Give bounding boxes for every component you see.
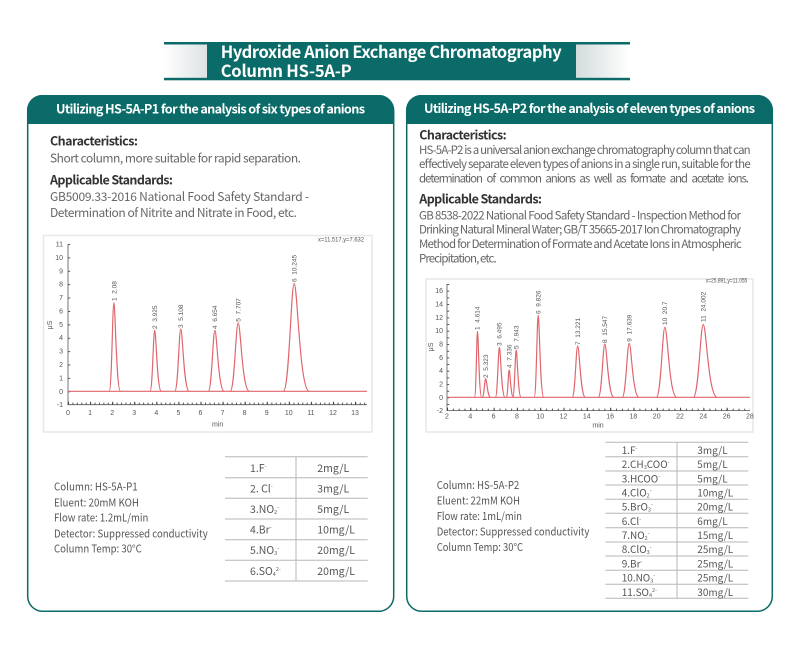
chromatogram chart: P1: 6 10.245 [292, 255, 298, 282]
concentration table: P1: 2- [276, 565, 281, 573]
experimental conditions: P2 [437, 477, 590, 555]
concentration table: P2: 1.F [622, 442, 636, 457]
characteristics text: P1: Characteristics: [50, 131, 138, 150]
title banner: Column HS-5A-P [221, 58, 352, 82]
experimental conditions: P2: Column: HS-5A-P2 [437, 477, 519, 493]
concentration table: P2: 20mg/L [697, 498, 734, 514]
characteristics text: P2: effectively separate eleven types of anions in a single run, suitable for the [419, 156, 751, 172]
chromatogram chart: P1: 0 [66, 410, 70, 417]
concentration table: P2: 8.ClO [622, 541, 647, 556]
chromatogram chart: P2: 6 [439, 355, 443, 362]
applicable standards text: P2: Method for Determination of Formate and Acetate Ions in Atmospheric [419, 236, 742, 252]
chromatogram chart: P1: 5 [59, 322, 63, 329]
chromatogram chart: P1: 13 [351, 410, 359, 417]
chromatogram chart: P1: μS [47, 320, 54, 329]
concentration table: P2: 6mg/L [697, 513, 728, 528]
concentration table: P1: 5.NO [250, 543, 274, 558]
characteristics text: P1 [50, 131, 301, 167]
chromatogram chart: P1: 4 6.654 [212, 305, 219, 329]
chromatogram chart: P2: 20 [653, 414, 661, 420]
chromatogram chart: P1: 10 [55, 255, 63, 262]
concentration table: P1 [225, 457, 368, 581]
chromatogram chart: P2: 2 5.323 [483, 354, 490, 378]
chromatogram chart: P2: 16 [435, 288, 443, 295]
concentration table: P2: 3mg/L [697, 442, 728, 457]
chromatogram chart: P1: 2 3.925 [152, 305, 159, 329]
concentration table: P1: - [277, 544, 279, 552]
chromatogram chart: P2: 7 13.221 [575, 318, 582, 345]
concentration table: P1: 1.F [250, 461, 265, 476]
chromatogram chart: P2: 0 [439, 395, 443, 402]
chromatogram chart: P1: 8 [243, 410, 247, 417]
chromatogram chart: P1: 6 [59, 308, 63, 316]
concentration table: P2: 3.HCOO [622, 470, 658, 486]
concentration table: P2: - [658, 472, 660, 480]
chromatogram chart: P1: 9 [59, 268, 63, 275]
concentration table: P1: 4.Br [250, 522, 270, 538]
chromatogram chart: P2: 26 [723, 414, 731, 420]
concentration table: P2: 2 [645, 534, 648, 542]
panel header: P2 [406, 95, 773, 124]
chromatogram chart: P2: 14 [583, 414, 591, 420]
concentration table: P2: 3 [647, 548, 650, 556]
concentration table: P2: 5mg/L [697, 456, 728, 471]
concentration table: P2: 5.BrO [622, 498, 648, 514]
concentration table: P2: 4 [649, 591, 652, 599]
chromatogram chart: P1: x=11.517,y=7.632 [318, 237, 364, 244]
chromatogram chart: P2: 16 [606, 414, 614, 420]
concentration table: P2 [605, 442, 748, 599]
chromatogram chart: P2: 10 20.7 [662, 301, 669, 325]
chromatogram chart: P1: 1 [59, 375, 63, 382]
experimental conditions: P1: Detector: Suppressed conductivity [54, 526, 208, 542]
chromatogram chart: P2: 28 [746, 414, 754, 420]
concentration table: P2: - [636, 444, 638, 452]
chromatogram chart: P1: 11 [307, 410, 315, 417]
title banner: Hydroxide Anion Exchange Chromatography [221, 39, 562, 63]
chromatogram chart: P1: 3 5.108 [178, 304, 185, 328]
panel header: P1 [27, 95, 394, 124]
applicable standards text: P2: Drinking Natural Mineral Water; GB/T 35665-2017 Ion Chromatography [419, 221, 741, 237]
chromatogram chart: P1: 7 [59, 295, 63, 302]
chromatogram chart: P1: 4 [154, 410, 158, 417]
chromatogram chart: P1: 5 7.707 [236, 298, 242, 322]
concentration table: P2: 7.NO [622, 527, 645, 542]
concentration table: P1: 20mg/L [317, 564, 355, 579]
chromatogram chart: P2: 3 6.495 [496, 322, 504, 346]
applicable standards text: P1: Determination of Nitrite and Nitrate in Food, etc. [50, 204, 297, 221]
chromatogram chart: P1: 11 [56, 242, 63, 248]
chromatogram chart: P1: 4 [59, 335, 63, 342]
applicable standards text: P1: GB5009.33-2016 National Food Safety Standard - [50, 188, 309, 205]
concentration table: P1: 10mg/L [317, 522, 355, 538]
chromatogram chart: P2: 12 [435, 315, 443, 322]
experimental conditions: P1: Eluent: 20mM KOH [54, 494, 139, 510]
concentration table: P1: - [265, 462, 267, 470]
experimental conditions: P2: Flow rate: 1mL/min [437, 508, 522, 524]
experimental conditions: P1 [54, 479, 208, 557]
chromatogram chart: P2: 4 [468, 414, 472, 420]
concentration table: P2: 15mg/L [697, 527, 734, 542]
chromatogram chart: P1: min [212, 422, 223, 429]
characteristics text: P2: Characteristics: [419, 124, 507, 143]
experimental conditions: P2: Column Temp: 30°C [437, 539, 523, 555]
concentration table: P2: 10mg/L [697, 484, 734, 500]
chromatogram chart: P2: 2 [445, 414, 449, 420]
concentration table: P1: 3 [274, 549, 277, 557]
applicable standards text: P2: Precipitation, etc. [419, 250, 497, 266]
concentration table: P2: - [648, 529, 650, 537]
concentration table: P2: 3 [650, 576, 653, 584]
concentration table: P1: - [270, 524, 272, 532]
experimental conditions: P1: Column: HS-5A-P1 [54, 479, 138, 495]
chromatogram chart: P1: 2 [110, 410, 114, 417]
chromatogram chart: P1: 2 [59, 362, 63, 369]
chromatogram chart: P2: 8 [439, 342, 443, 348]
chromatogram chart: P2 [426, 278, 754, 432]
applicable standards text: P2: GB 8538-2022 National Food Safety Standard - Inspection Method for [419, 207, 742, 223]
chromatogram chart: P2: 6 [492, 414, 496, 420]
concentration table: P1: 2 [274, 508, 277, 516]
chromatogram chart: P2: min [592, 422, 604, 430]
concentration table: P2: COO [647, 456, 668, 471]
chromatogram chart: P2: 9 17.639 [626, 314, 633, 342]
chromatogram chart: P1: 10 [285, 410, 293, 417]
chromatogram chart: P1: 1 [88, 410, 92, 417]
concentration table: P1: - [277, 503, 279, 511]
concentration table: P2: 6.Cl [622, 513, 639, 528]
chromatogram chart: P2: 2 [439, 382, 443, 388]
chromatogram chart: P2: 1 4.614 [474, 306, 482, 330]
concentration table: P2: - [640, 558, 642, 566]
concentration table: P2: 25mg/L [697, 570, 734, 584]
concentration table: P2: 30mg/L [697, 584, 734, 599]
concentration table: P1: 6.SO [250, 564, 273, 579]
characteristics text: P2: HS-5A-P2 is a universal anion exchange chromatography column that can [419, 142, 751, 158]
title banner [164, 39, 630, 82]
concentration table: P1: 4 [273, 570, 276, 578]
concentration table: P2: 9.Br [622, 556, 640, 570]
chromatogram chart: P2: 10 [435, 328, 443, 335]
chromatogram chart: P1: 0 [59, 389, 63, 396]
panel: HS-5A-P1 analysis of six anions [27, 95, 394, 611]
concentration table: P2: 25mg/L [697, 556, 734, 570]
chromatogram chart: P1: 6 [199, 410, 203, 417]
characteristics text: P1: Short column, more suitable for rapid separation. [50, 150, 301, 167]
concentration table: P2: 3 [648, 506, 651, 514]
applicable standards text: P2 [418, 188, 742, 266]
chromatogram chart: P2: 12 [560, 414, 567, 420]
chromatogram chart: P1: -1 [57, 402, 63, 409]
chromatogram chart: P2: 11 24.002 [700, 291, 707, 322]
concentration table: P2: 2- [652, 586, 657, 594]
chromatogram chart: P1: 5 [176, 410, 180, 417]
chromatogram chart: P1: 7 [221, 410, 225, 417]
concentration table: P1: 3.NO [250, 502, 274, 517]
chromatogram chart: P2: 5 7.943 [513, 325, 520, 349]
experimental conditions: P1: Column Temp: 30°C [54, 541, 142, 557]
chromatogram chart: P1: 8 [59, 282, 63, 289]
experimental conditions: P2: Eluent: 22mM KOH [437, 492, 520, 508]
concentration table: P1: - [271, 483, 273, 491]
chromatogram chart: P1 [44, 236, 372, 432]
concentration table: P1: 20mg/L [317, 543, 355, 558]
concentration table: P2: 2.CH [622, 456, 644, 471]
chromatogram chart: P2: 18 [630, 414, 637, 420]
chromatogram chart: P1: 9 [265, 410, 269, 417]
chromatogram chart: P2: x=25.891,y=11.055 [706, 278, 748, 285]
chromatogram chart: P2: 22 [676, 414, 684, 420]
concentration table: P2: 25mg/L [697, 541, 734, 556]
concentration table: P2: - [668, 458, 670, 466]
characteristics text: P2: determination of common anions as well as formate and acetate ions. [419, 170, 749, 186]
chromatogram chart: P2: 10 [536, 414, 544, 420]
concentration table: P1: 5mg/L [317, 502, 349, 517]
panel: HS-5A-P2 analysis of eleven anions [406, 95, 773, 611]
concentration table: P1: 2mg/L [317, 461, 349, 476]
panel header: P1: Utilizing HS-5A-P1 for the analysis of six types of anions [56, 98, 365, 117]
concentration table: P2: - [650, 486, 652, 494]
chromatogram chart: P1: 3 [132, 410, 136, 417]
panel header: P2: Utilizing HS-5A-P2 for the analysis of eleven types of anions [424, 98, 755, 117]
chromatogram chart: P2: μS [428, 342, 435, 351]
concentration table: P2: 3 [644, 463, 647, 471]
experimental conditions: P1: Flow rate: 1.2mL/min [54, 510, 148, 526]
chromatogram chart: P2: 4 [439, 368, 443, 375]
characteristics text: P2 [419, 124, 751, 186]
applicable standards text: P2: Applicable Standards: [418, 188, 542, 207]
chromatogram chart: P1: 12 [329, 410, 337, 417]
concentration table: P1: 3mg/L [317, 482, 349, 497]
applicable standards text: P1: Applicable Standards: [49, 169, 173, 188]
chromatogram chart: P2: 24 [699, 414, 707, 420]
chromatogram chart: P2: 14 [435, 302, 443, 308]
concentration table: P2: - [639, 515, 641, 523]
concentration table: P2: - [653, 572, 655, 580]
concentration table: P2: 10.NO [622, 570, 650, 584]
concentration table: P2: 11.SO [622, 584, 649, 599]
concentration table: P2: - [650, 543, 652, 551]
chromatogram chart: P2: -2 [437, 408, 443, 415]
chromatogram chart: P2: 4 7.336 [506, 344, 513, 368]
concentration table: P1: 2. Cl [250, 482, 271, 497]
applicable standards text: P1 [49, 169, 309, 221]
experimental conditions: P2: Detector: Suppressed conductivity [437, 524, 590, 540]
chromatogram chart: P2: 8 15.547 [602, 316, 609, 343]
concentration table: P2: - [651, 500, 653, 508]
chromatogram chart: P2: 6 9.826 [535, 290, 542, 314]
concentration table: P2: 5mg/L [697, 470, 728, 486]
concentration table: P2: 2 [647, 492, 650, 500]
chromatogram chart: P1: 3 [59, 349, 63, 356]
chromatogram chart: P1: 1 2.08 [111, 281, 118, 301]
concentration table: P2: 4.ClO [622, 484, 647, 500]
chromatogram chart: P2: 8 [515, 414, 519, 420]
